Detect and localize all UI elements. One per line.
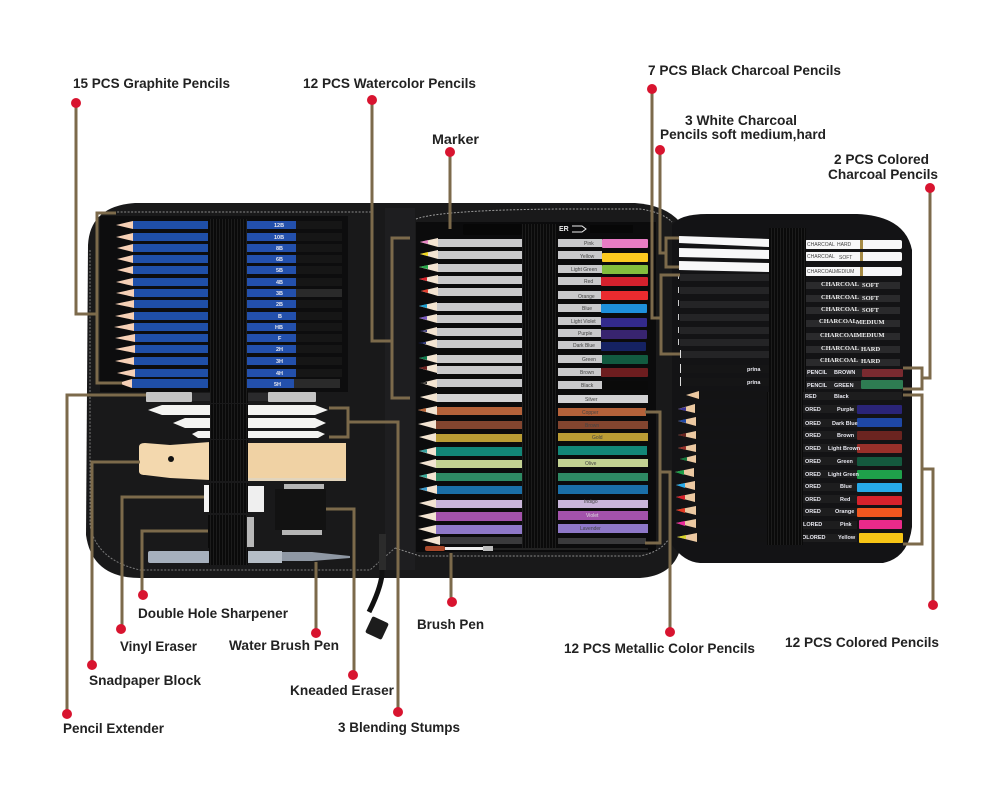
pencil: charcoal hard 2: HARD [861, 358, 880, 365]
pencil: charcoal soft 3: SOFT [862, 307, 880, 314]
pencil: brown charcoal: BROWN [834, 370, 855, 376]
pencil: Orange [676, 506, 902, 517]
callout: Water Brush Pen: Water Brush Pen [229, 637, 339, 653]
pencil: B: B [278, 314, 282, 320]
pencil: Red: Red [840, 497, 850, 503]
pencil: Lavender [418, 524, 648, 534]
callout: 2 PCS Colored Charcoal Pencils: 2 PCS Colored [834, 151, 929, 167]
pencil: Pink: LORED [803, 522, 822, 528]
pencil: Red: Red [584, 279, 593, 285]
pencil: Orange: Orange [578, 294, 595, 300]
pencil: Green: Green [582, 357, 596, 363]
pencil: Blue: Blue [840, 484, 852, 490]
pencil: Red: ORED [805, 497, 821, 503]
callout: 3 Blending Stumps [329, 408, 460, 735]
callout: Marker [432, 131, 480, 229]
callout: Brush Pen [417, 553, 484, 632]
pencil: charcoal soft 2 [678, 287, 900, 302]
pencil: 12B: 12B [274, 223, 284, 229]
pencil: Green: ORED [805, 459, 821, 465]
panel: right flap of case [672, 214, 912, 563]
pencil: 2B: 2B [276, 302, 283, 308]
pencil: white hard: HARD [837, 242, 852, 248]
pencil: charcoal soft 2: SOFT [862, 295, 880, 302]
pencil: white medium: MEDIUM [834, 269, 854, 275]
callout: 12 PCS Metallic Color Pencils: 12 PCS Metallic Color Pencils [564, 640, 755, 656]
pencil: Gold: Gold [592, 435, 603, 441]
pencil: charcoal hard 2 [680, 350, 900, 366]
pencil: green charcoal: GREEN [834, 383, 854, 389]
pencil: B [115, 312, 342, 320]
pencil: charcoal soft 2: CHARCOAL [821, 294, 860, 301]
pencil set: 3 white charcoal pencils [679, 236, 902, 276]
pencil: Orange: ORED [805, 509, 821, 515]
pencil: Light Violet: Light Violet [571, 319, 596, 325]
pencil: Yellow [677, 533, 903, 543]
pencil: Indigo [419, 499, 648, 508]
pencil: F: F [278, 336, 282, 342]
pencil: Indigo: Indigo [584, 499, 598, 505]
pencil: charcoal hard 1 [678, 339, 900, 353]
callout: 12 PCS Colored Pencils: 12 PCS Colored Pencils [785, 634, 939, 650]
pencil: Brown metallic: Brown [585, 423, 599, 429]
callout: Water Brush Pen [229, 562, 339, 653]
double hole sharpener [208, 515, 254, 548]
pencil: Light Violet [419, 314, 647, 327]
callout: 15 PCS Graphite Pencils: 15 PCS Graphite Pencils [73, 75, 230, 91]
3 blending stumps [148, 404, 328, 439]
elastic band [522, 224, 558, 548]
pencil: Violet: Violet [586, 513, 599, 519]
pencil: 4H: 4H [276, 371, 283, 377]
pencil: 6B: 6B [276, 257, 283, 263]
brush pen [425, 546, 648, 551]
pencil: Red [419, 275, 648, 286]
pencil extender [146, 391, 316, 403]
zipper pull and strap [365, 534, 389, 640]
pencil set: 12 colored pencils [675, 391, 903, 545]
pencil: 5H: 5H [274, 382, 281, 388]
pencil: 5B: 5B [276, 268, 283, 274]
pencil: charcoal soft 3 [678, 300, 900, 314]
pencil: Light Brown [678, 444, 902, 453]
pencil: Red [676, 493, 902, 505]
pencil set: 15 graphite pencils [114, 219, 342, 391]
pencil: white medium: CHARCOAL [807, 269, 835, 275]
pencil set: 12 metallic color pencils [418, 224, 648, 548]
pencil: charcoal soft 3: CHARCOAL [821, 306, 860, 313]
pencil: charcoal hard 1: HARD [861, 346, 880, 353]
pencil: 2H [115, 345, 342, 353]
pencil: Copper: Copper [582, 410, 599, 416]
callout: Vinyl Eraser: Vinyl Eraser [120, 638, 198, 654]
pencil: Yellow: Yellow [580, 254, 595, 260]
pencil: Brown [419, 364, 648, 377]
pencil: white soft: CHARCOAL [807, 254, 835, 260]
pencil: Light Green: Light Green [828, 472, 860, 478]
callout: 7 PCS Black Charcoal Pencils [647, 62, 841, 354]
callout: Snadpaper Block [87, 462, 201, 688]
pencil set: 12 watercolor pencils [418, 238, 648, 390]
pencil: Olive: Olive [585, 461, 597, 467]
pencil: Olive [419, 459, 648, 468]
pencil: 3B [116, 289, 342, 297]
pencil: Teal [419, 446, 647, 456]
callout: 15 PCS Graphite Pencils [71, 75, 230, 383]
callout: Pencil Extender [62, 395, 165, 736]
pencil: Black [686, 391, 902, 400]
pencil: 8B [117, 244, 342, 252]
pencil: brown charcoal: PENCIL [807, 370, 828, 376]
pencil: Purple: Purple [578, 331, 593, 337]
pencil: Dark Blue [418, 339, 646, 351]
pencil: 3B: 3B [276, 291, 283, 297]
pencil: Silver [420, 393, 648, 403]
pencil: Black: Black [834, 394, 850, 400]
pencil: 10B: 10B [274, 235, 284, 241]
vinyl eraser [204, 483, 264, 513]
pencil: Brown [678, 431, 902, 440]
callout: Kneaded Eraser [290, 509, 395, 698]
pencil: Yellow: OLORED [802, 535, 826, 541]
panel: main open case [86, 203, 680, 578]
pencil: HB: HB [275, 325, 283, 331]
callout: 7 PCS Black Charcoal Pencils: 7 PCS Black Charcoal Pencils [648, 62, 841, 78]
pencil: white soft [679, 248, 902, 261]
pencil: charcoal medium 2 [678, 327, 900, 340]
pencil: Light Brown: ORED [805, 446, 821, 452]
callout: Vinyl Eraser [116, 497, 204, 654]
pencil: 4H [117, 369, 342, 377]
pencil: 4B [116, 278, 342, 286]
pencil: charcoal soft 1 [678, 274, 900, 289]
pencil: Light Green [675, 468, 902, 479]
pencil: Black metallic [422, 536, 646, 545]
marker [463, 224, 633, 235]
pencil: charcoal soft 1: SOFT [862, 282, 880, 289]
pencil: Green: Green [837, 459, 854, 465]
pencil: Orange: Orange [835, 509, 854, 515]
pencil: charcoal medium 2: CHARCOAL [820, 332, 859, 339]
pencil: 2B [115, 300, 342, 308]
callout: Kneaded Eraser: Kneaded Eraser [290, 682, 395, 698]
pencil: Green [680, 455, 902, 466]
pencil: Silver: Silver [585, 397, 598, 403]
pencil: 3H: 3H [276, 359, 283, 365]
pencil: Copper [418, 406, 646, 416]
pencil: white soft: SOFT [839, 255, 852, 261]
pencil: white hard [679, 236, 902, 249]
pencil set: 7 black charcoal pencils [678, 274, 900, 366]
pencil: Violet [418, 511, 648, 521]
elastic band [208, 219, 247, 391]
pencil: Light Brown: Light Brown [828, 446, 861, 452]
callout: 3 White Charcoal Pencils: 3 White Charcoal [685, 112, 797, 128]
pencil: charcoal medium 1: MEDIUM [856, 319, 885, 326]
callout: 3 White Charcoal Pencils: Pencils soft medium,hard [660, 126, 826, 142]
callout: 2 PCS Colored Charcoal Pencils: Charcoal Pencils [828, 166, 938, 182]
pencil: Purple [678, 404, 902, 414]
callout: Marker: Marker [432, 131, 480, 147]
callout: 12 PCS Colored Pencils [785, 395, 939, 650]
sandpaper block [139, 440, 346, 481]
marker: ER [559, 226, 569, 233]
pencil: 6B [117, 255, 342, 263]
pencil: Dark Blue: Dark Blue [573, 343, 595, 349]
pencil: Brown: ORED [805, 433, 821, 439]
pencil: Lavender: Lavender [580, 526, 601, 532]
pencil: 2H: 2H [276, 347, 283, 353]
pencil: Orange [421, 287, 648, 300]
pencil: charcoal soft 1: CHARCOAL [821, 281, 860, 288]
pencil: 8B: 8B [276, 246, 283, 252]
callout: Brush Pen: Brush Pen [417, 616, 484, 632]
pencil: white hard: CHARCOAL [807, 242, 835, 248]
pencil: charcoal hard 2: CHARCOAL [820, 357, 859, 364]
pencil: Blue: Blue [582, 306, 592, 312]
callout: 3 Blending Stumps: 3 Blending Stumps [338, 719, 460, 735]
pencil: Pink: Pink [840, 522, 853, 528]
pencil: Pink [676, 519, 902, 529]
elastic band [767, 392, 803, 545]
callout: 12 PCS Watercolor Pencils [303, 75, 476, 398]
pencil: Yellow [420, 250, 648, 262]
pencil: Blue [676, 481, 902, 492]
pencil: Brown: Brown [837, 433, 855, 439]
pencil: Pink: Pink [584, 241, 594, 247]
pencil: Blue [419, 302, 647, 313]
callout: 2 PCS Colored Charcoal Pencils [828, 151, 938, 389]
pencil: Dark Blue: ORED [805, 421, 821, 427]
pencil: Black [419, 379, 648, 390]
callout: Double Hole Sharpener [138, 531, 289, 621]
pencil: brown charcoal: prina [747, 367, 761, 373]
pencil: 4B: 4B [276, 280, 283, 286]
pencil: Blue: ORED [805, 484, 821, 490]
pencil: Blue metallic [419, 485, 648, 494]
callout: Snadpaper Block: Snadpaper Block [89, 672, 201, 688]
pencil: Yellow: Yellow [838, 535, 856, 541]
pencil: brown charcoal [680, 364, 903, 377]
pencil: Gold [419, 433, 648, 442]
pencil: 10B [116, 233, 342, 241]
water brush pen [148, 548, 350, 565]
kneaded eraser [275, 484, 326, 535]
pencil: Green metallic [419, 472, 648, 481]
pencil: green charcoal: PENCIL [807, 383, 828, 389]
pencil: Purple: ORED [805, 407, 821, 413]
pencil: Brown metallic [418, 420, 648, 429]
pencil: Brown: Brown [580, 370, 594, 376]
pencil: 3H [115, 357, 342, 365]
pencil: charcoal medium 2: MEDIUM [856, 332, 885, 339]
pencil: charcoal medium 1 [678, 314, 900, 327]
pencil: 12B [116, 221, 342, 229]
pencil: Light Green [419, 263, 648, 274]
pencil: Black: RED [805, 394, 817, 400]
callout: Double Hole Sharpener: Double Hole Sharpener [138, 605, 289, 621]
callout: 12 PCS Watercolor Pencils: 12 PCS Watercolor Pencils [303, 75, 476, 91]
pencil set: 2 colored charcoal pencils [680, 228, 903, 392]
pencil: 5H [118, 379, 340, 388]
pencil: Dark Blue [678, 417, 902, 427]
callout: 12 PCS Metallic Color Pencils [564, 412, 755, 656]
pencil: Black: Black [581, 383, 594, 389]
pencil: green charcoal: prina [747, 380, 761, 386]
pencil: Green [419, 354, 648, 364]
callout: Pencil Extender: Pencil Extender [63, 720, 165, 736]
pencil: Purple: Purple [837, 407, 854, 413]
pencil: charcoal hard 1: CHARCOAL [821, 345, 860, 352]
pencil: white medium [679, 261, 902, 276]
pencil: 5B [117, 266, 342, 274]
pencil: Dark Blue: Dark Blue [832, 421, 858, 427]
pencil: Light Green: Light Green [571, 267, 597, 273]
callout: 3 White Charcoal Pencils [655, 112, 826, 267]
pencil: HB [114, 323, 342, 331]
pencil: Pink [420, 238, 648, 248]
pencil: F [115, 334, 342, 342]
pencil: Light Green: ORED [805, 472, 821, 478]
pencil: charcoal medium 1: CHARCOAL [819, 318, 858, 325]
pencil: Purple [419, 327, 647, 339]
elastic band [769, 228, 806, 392]
pencil: green charcoal [680, 377, 903, 389]
